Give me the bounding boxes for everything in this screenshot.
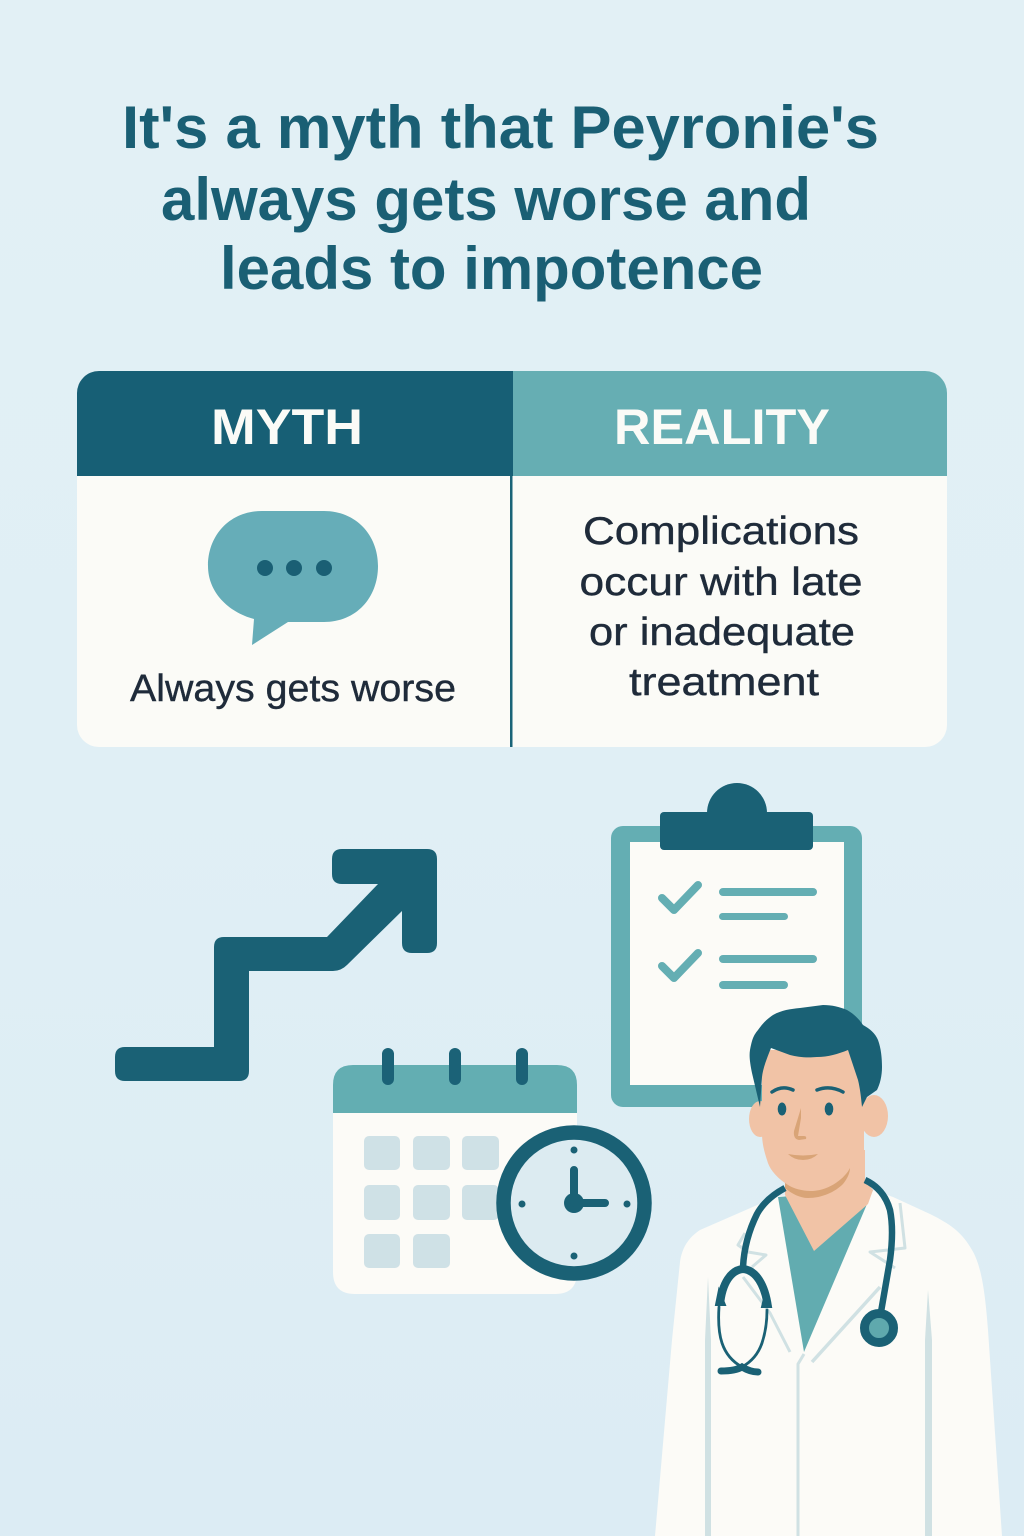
jaw shadow (785, 1168, 850, 1198)
heading: reality: REALITY (614, 399, 830, 455)
doctor face (762, 1050, 864, 1192)
doctor mouth (788, 1154, 818, 1160)
title (122, 94, 879, 302)
text: reality statement: treatment (629, 661, 819, 704)
text: reality statement (580, 510, 862, 704)
heading: myth: MYTH (211, 399, 363, 455)
icon: speech bubble (208, 511, 378, 645)
panel: myth vs reality table (77, 371, 947, 747)
doctor brows (772, 1088, 843, 1092)
illustration: doctor (655, 1005, 1002, 1536)
doctor eyes (778, 1102, 786, 1116)
doctor coat (655, 1190, 1002, 1536)
text: reality statement: occur with late (580, 561, 862, 604)
text: reality statement: or inadequate (589, 611, 855, 654)
doctor scrubs (778, 1190, 873, 1352)
text: reality statement: Complications (583, 510, 859, 553)
doctor neck (785, 1150, 873, 1251)
title: It's a myth that Peyronie's (122, 94, 879, 161)
icon: clipboard checklist (611, 783, 862, 1107)
doctor hair (750, 1005, 882, 1107)
text: myth statement: Always gets worse (130, 668, 456, 710)
icon: rising stepped arrow (115, 849, 437, 1081)
icon: calendar (333, 1048, 577, 1294)
coat folds and lapels (705, 1203, 932, 1536)
title: always gets worse and (161, 166, 811, 233)
title: leads to impotence (220, 235, 763, 302)
doctor ears (749, 1101, 771, 1137)
icon: clock (504, 1132, 644, 1274)
stethoscope (716, 1180, 894, 1372)
doctor nose (794, 1108, 806, 1140)
